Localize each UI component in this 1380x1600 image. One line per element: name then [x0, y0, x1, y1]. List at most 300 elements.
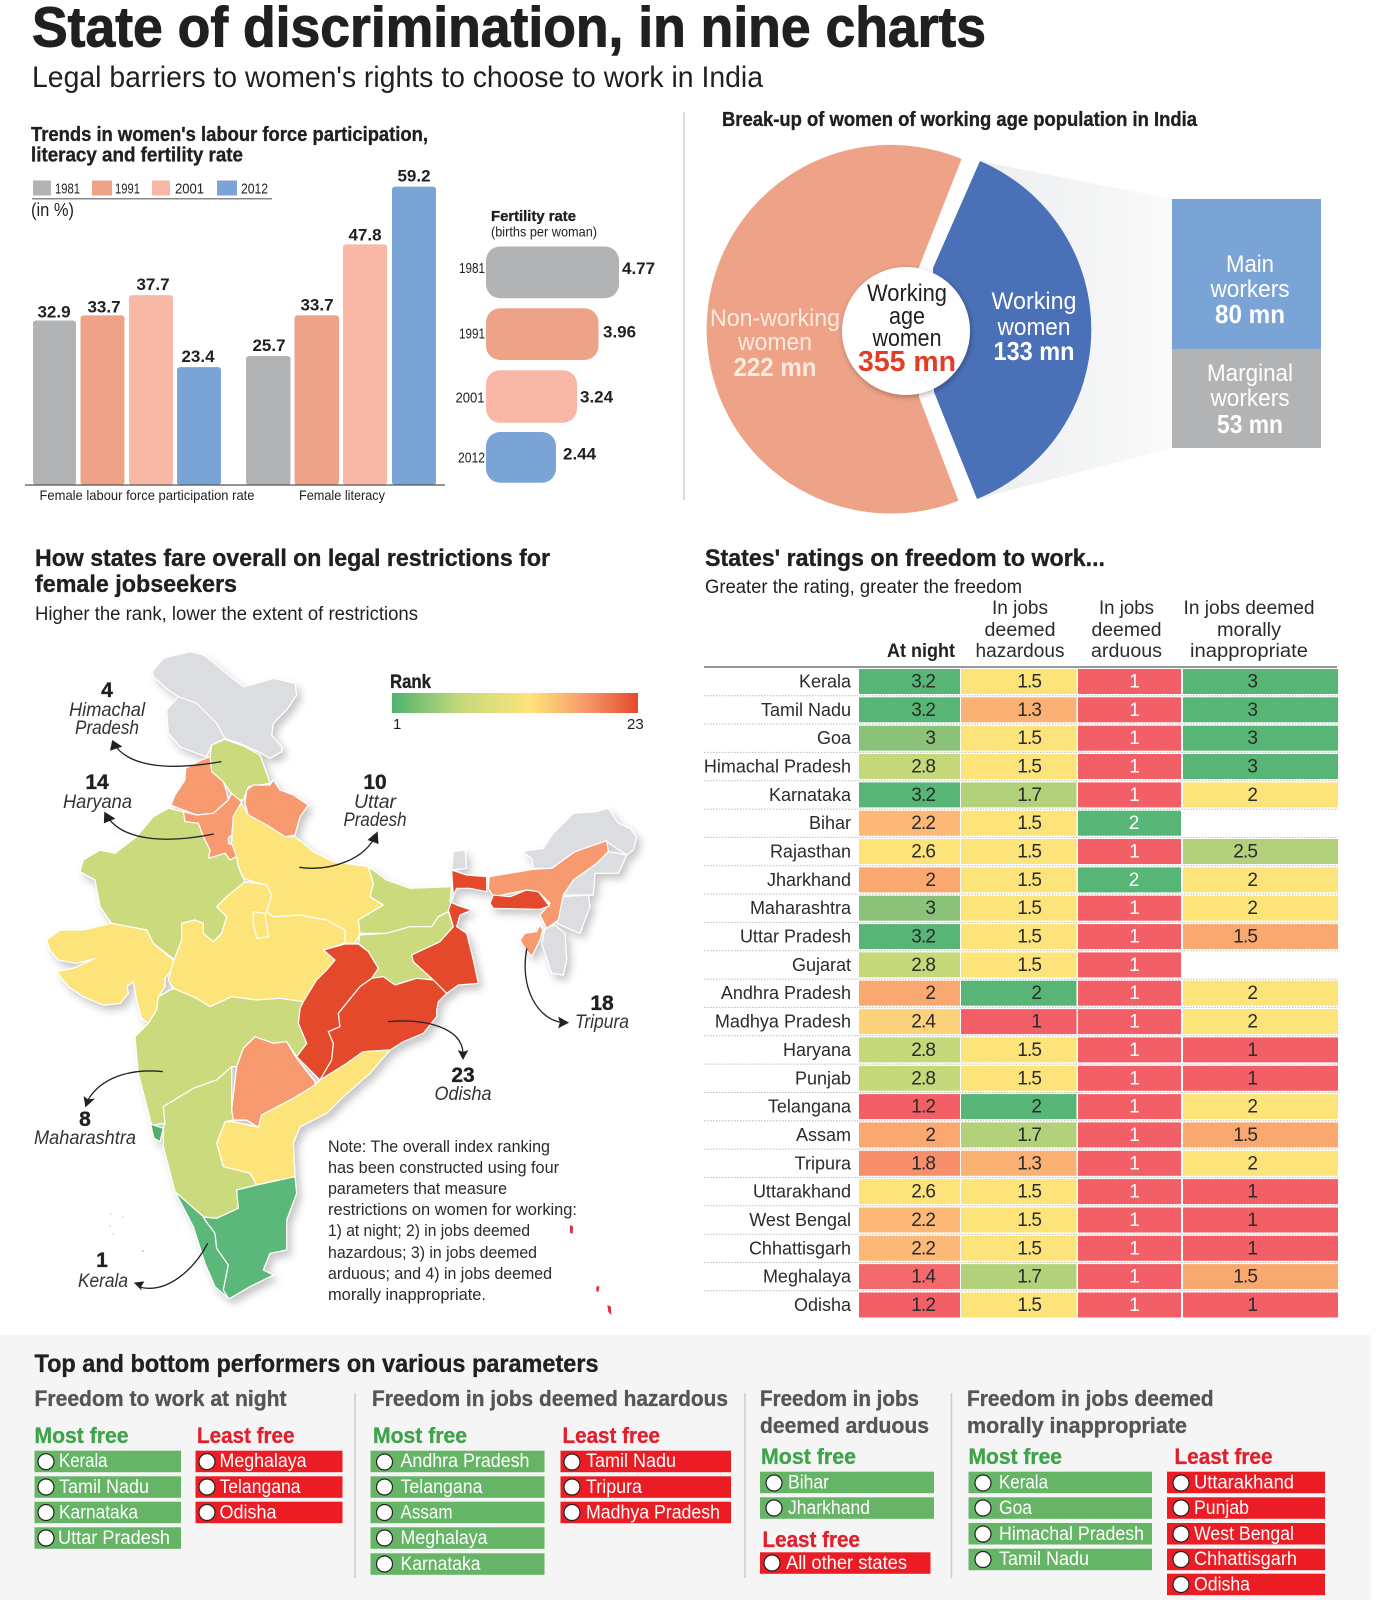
- row: Punjab: [704, 1066, 1338, 1092]
- row: Himachal Pradesh: 2.8: [911, 756, 935, 778]
- row: Karnataka: Karnataka: [769, 785, 852, 805]
- label: working women: [992, 288, 1076, 366]
- callout: Uttar Pradesh rank 10: Uttar: [354, 792, 397, 813]
- row: Jharkhand: Jharkhand: [767, 870, 851, 890]
- row: Assam: [704, 1122, 1338, 1149]
- row: Jharkhand: 2: [1247, 870, 1257, 891]
- centre circle: working age women: women: [872, 325, 942, 352]
- legend: rank scale: Rank: [390, 672, 431, 693]
- Bundelkhand lobe: [253, 912, 268, 938]
- list: hazardous most free: Meghalaya: [400, 1528, 488, 1549]
- bar chart: fertility rate: 1981: [459, 260, 485, 277]
- heading: performers: Top and bottom performers on various parameters: [34, 1350, 598, 1378]
- row: Gujarat: Gujarat: [792, 955, 851, 975]
- arrow: Maharashtra: [84, 1071, 163, 1107]
- row: Kerala: Kerala: [799, 672, 852, 692]
- row: Goa: 3: [1247, 728, 1257, 749]
- column headers: morally: [1217, 620, 1282, 641]
- arrow: Odisha: [388, 1021, 468, 1060]
- row: Andhra Pradesh: 2: [1247, 983, 1257, 1004]
- row: Kerala: [704, 669, 1338, 696]
- row: Rajasthan: 1.5: [1017, 842, 1041, 862]
- group: freedom in jobs deemed arduous: [760, 1386, 934, 1574]
- list: morally inappropriate most free: [968, 1444, 1152, 1570]
- Odisha: [320, 977, 447, 1080]
- callout: Tripura rank 18: [575, 992, 629, 1033]
- list: night most free: Karnataka: [59, 1502, 138, 1524]
- row: Andhra Pradesh: [704, 981, 1338, 1007]
- row: Himachal Pradesh: Himachal Pradesh: [704, 756, 851, 776]
- row: Himachal Pradesh: 1: [1129, 756, 1140, 778]
- list: arduous least free: [760, 1527, 930, 1574]
- list: hazardous most free: Most free: [373, 1423, 467, 1448]
- row: Punjab: 1.5: [1017, 1068, 1041, 1089]
- list: night most free: Tamil Nadu: [59, 1477, 149, 1498]
- map of India: [47, 652, 637, 1315]
- heading: ratings: States' ratings on freedom to work...: [705, 545, 1105, 572]
- bar chart: labour force participation: [33, 275, 221, 485]
- note: index methodology: Note: The overall index ranking: [328, 1137, 550, 1156]
- list: morally inappropriate most free: Goa: [999, 1498, 1032, 1519]
- callout: Kerala rank 1: Kerala: [78, 1271, 128, 1292]
- legend: years: 2001: [175, 181, 204, 198]
- row: Uttar Pradesh: [704, 924, 1338, 951]
- heading: fertility rate: (births per woman): [491, 223, 597, 239]
- list: arduous least free: All other states: [786, 1553, 907, 1574]
- row: Telangana: [704, 1094, 1338, 1121]
- heading: arduous: [760, 1386, 929, 1438]
- row: Gujarat: 1.5: [1017, 955, 1041, 976]
- centre circle: working age women: age: [889, 303, 925, 330]
- row: Uttar Pradesh: 1: [1129, 927, 1140, 948]
- bar chart: fertility rate: [456, 246, 655, 483]
- row: Kerala: 3.2: [911, 672, 935, 692]
- callout: Odisha rank 23: 23: [451, 1064, 475, 1087]
- row: Chhattisgarh: 2.2: [911, 1238, 935, 1259]
- callout: Odisha rank 23: [434, 1064, 492, 1105]
- islands: Lakshadweep: [109, 1213, 144, 1252]
- row: Gujarat: 2.8: [911, 955, 935, 976]
- row: Meghalaya: 1: [1129, 1267, 1140, 1288]
- row: West Bengal: [704, 1208, 1338, 1234]
- subheading: map: Higher the rank, lower the extent of restrictions: [35, 604, 418, 625]
- note: index methodology: arduous; and 4) in jobs deemed: [328, 1264, 552, 1283]
- row: Andhra Pradesh: 2: [1031, 983, 1041, 1004]
- list: hazardous most free: Karnataka: [400, 1554, 481, 1575]
- callout: Uttar Pradesh rank 10: [344, 771, 406, 831]
- list: morally inappropriate least free: Least free: [1174, 1444, 1272, 1469]
- note: index methodology: morally inappropriate.: [328, 1285, 486, 1304]
- arrows and islands: [84, 740, 611, 1315]
- Chhattisgarh: [297, 944, 378, 1080]
- heading: morally inappropriate: [967, 1386, 1214, 1438]
- row: Uttar Pradesh: 1.5: [1233, 927, 1257, 948]
- row: Madhya Pradesh: [704, 1009, 1338, 1036]
- callout: Haryana rank 14: [63, 771, 132, 813]
- row: Rajasthan: 2.5: [1233, 842, 1257, 862]
- label: working women: Working: [992, 288, 1076, 315]
- label: working women: 133 mn: [994, 336, 1074, 366]
- row: Kerala: 1: [1129, 672, 1140, 692]
- row: Odisha: 1.5: [1017, 1295, 1041, 1316]
- axis label: labour force: Female labour force participation rate: [40, 487, 255, 503]
- row: Punjab: 2.8: [911, 1068, 935, 1089]
- bar chart: labour force participation: 33.7: [87, 297, 121, 316]
- legend: years: 1991: [115, 181, 140, 198]
- row: Karnataka: 2: [1247, 785, 1257, 806]
- row: Tripura: 1.8: [911, 1153, 935, 1174]
- list: night least free: Telangana: [220, 1477, 301, 1498]
- panel: state rank map: [34, 545, 644, 1315]
- row: Uttar Pradesh: 3.2: [911, 927, 935, 948]
- note: index methodology: restrictions on women for working:: [328, 1200, 577, 1219]
- row: Telangana: Telangana: [768, 1097, 852, 1117]
- list: night least free: [196, 1423, 342, 1524]
- row: Punjab: 1: [1129, 1068, 1140, 1089]
- Haryana: [183, 793, 242, 860]
- row: Odisha: 1: [1129, 1295, 1140, 1316]
- Jharkhand: [358, 912, 453, 985]
- column headers: deemed: [984, 620, 1056, 641]
- heading: night: Freedom to work at night: [34, 1386, 287, 1411]
- pie slice: non-working women: [707, 145, 962, 514]
- column headers: [887, 598, 1314, 662]
- Bihar: [358, 867, 452, 933]
- list: night most free: Kerala: [59, 1451, 108, 1472]
- row: Telangana: 1: [1129, 1097, 1140, 1118]
- row: Maharashtra: 1: [1129, 898, 1140, 919]
- bar chart: female literacy: 59.2: [397, 166, 431, 186]
- Tripura: [520, 925, 543, 957]
- callout: Maharashtra rank 8: Maharashtra: [34, 1128, 136, 1149]
- row: Meghalaya: 1.4: [911, 1267, 936, 1288]
- row: Odisha: 1: [1247, 1295, 1257, 1316]
- Rajasthan: [80, 808, 245, 960]
- row: Tamil Nadu: 1: [1129, 700, 1140, 721]
- row: Andhra Pradesh: Andhra Pradesh: [721, 983, 851, 1003]
- box: main workers: workers: [1210, 276, 1290, 303]
- Karnataka: [163, 1067, 257, 1218]
- row: Himachal Pradesh: [704, 754, 1338, 781]
- row: Goa: 1.5: [1017, 728, 1041, 749]
- row: Telangana: 1.2: [911, 1097, 935, 1118]
- row: Maharashtra: Maharashtra: [750, 898, 852, 918]
- note: index methodology: [328, 1137, 577, 1304]
- row: Andhra Pradesh: 1: [1129, 983, 1140, 1004]
- row: Jharkhand: [704, 867, 1338, 894]
- row: Bihar: 2: [1129, 813, 1139, 834]
- row: Madhya Pradesh: 1: [1031, 1012, 1041, 1033]
- row: Madhya Pradesh: 2.4: [911, 1012, 936, 1033]
- row: Uttarakhand: [704, 1179, 1338, 1206]
- Manipur: [557, 895, 590, 933]
- row: Tripura: 1: [1129, 1153, 1140, 1174]
- row: Karnataka: 1: [1129, 785, 1140, 806]
- subheading: ratings: Greater the rating, greater the freedom: [705, 577, 1022, 598]
- row: Gujarat: [704, 952, 1338, 979]
- row: Meghalaya: 1.7: [1017, 1267, 1041, 1288]
- list: hazardous least free: Least free: [562, 1423, 660, 1448]
- row: Uttarakhand: 1: [1129, 1182, 1140, 1203]
- list: arduous most free: Jharkhand: [788, 1498, 870, 1519]
- column headers: deemed: [1092, 620, 1162, 641]
- heading: break-up: Break-up of women of working age population in India: [722, 109, 1198, 131]
- bar chart: fertility rate: 2001: [456, 390, 484, 407]
- column headers: hazardous: [976, 641, 1064, 662]
- list: arduous least free: Least free: [762, 1527, 860, 1552]
- arrow: Uttar Pradesh: [299, 831, 379, 868]
- heading: trends: Trends in women's labour force participation,: [31, 124, 428, 146]
- list: hazardous least free: Tripura: [586, 1477, 642, 1498]
- callout: Maharashtra rank 8: 8: [79, 1108, 91, 1131]
- legend: rank scale: 23: [627, 716, 644, 733]
- row: Madhya Pradesh: Madhya Pradesh: [715, 1012, 851, 1032]
- heading: trends: literacy and fertility rate: [31, 144, 243, 166]
- callout: Odisha rank 23: Odisha: [434, 1084, 492, 1105]
- list: morally inappropriate least free: West Bengal: [1194, 1524, 1294, 1545]
- row: Jharkhand: 1.5: [1017, 870, 1041, 891]
- bar chart: female literacy: 33.7: [300, 295, 334, 314]
- row: Assam: 1.7: [1017, 1125, 1041, 1146]
- row: Punjab: 1: [1247, 1068, 1257, 1089]
- row: West Bengal: 1: [1247, 1210, 1257, 1231]
- row: West Bengal: 2.2: [911, 1210, 935, 1231]
- row: Maharashtra: [704, 896, 1338, 922]
- bar chart: female literacy: 47.8: [348, 225, 382, 244]
- callout: Uttar Pradesh rank 10: Pradesh: [344, 810, 406, 831]
- row: Rajasthan: 2.6: [911, 842, 935, 862]
- list: hazardous least free: [560, 1423, 731, 1524]
- row: West Bengal: 1.5: [1017, 1210, 1041, 1231]
- callout: Tripura rank 18: 18: [590, 992, 614, 1015]
- note: index methodology: 1) at night; 2) in jobs deemed: [328, 1221, 530, 1240]
- column headers: inappropriate: [1190, 641, 1308, 662]
- heading: morally inappropriate: morally inappropriate: [967, 1413, 1187, 1438]
- heading: hazardous: Freedom in jobs deemed hazardous: [372, 1386, 728, 1411]
- group: freedom in jobs deemed hazardous: [370, 1386, 731, 1575]
- group: freedom in jobs deemed morally inappropriate: [967, 1386, 1325, 1596]
- callout: Maharashtra rank 8: [34, 1108, 136, 1149]
- list: morally inappropriate least free: Uttarakhand: [1194, 1472, 1294, 1494]
- Mizoram: [542, 925, 567, 975]
- bar chart: female literacy: 25.7: [252, 336, 286, 355]
- list: night most free: Most free: [34, 1423, 128, 1448]
- list: morally inappropriate least free: Punjab: [1194, 1498, 1249, 1519]
- box: marginal workers: workers: [1210, 385, 1290, 412]
- bar chart: labour force participation: 23.4: [181, 347, 215, 366]
- list: hazardous most free: [370, 1423, 544, 1575]
- Andhra Pradesh: [217, 1050, 390, 1185]
- list: arduous most free: Most free: [761, 1444, 856, 1469]
- Assam: [488, 841, 608, 928]
- row: Tripura: [704, 1151, 1338, 1178]
- box: marginal workers: 53 mn: [1217, 409, 1283, 439]
- row: Madhya Pradesh: 2: [1247, 1012, 1257, 1033]
- row: Rajasthan: 1: [1129, 842, 1140, 862]
- callout: Haryana rank 14: Haryana: [63, 792, 132, 813]
- Goa: [151, 1124, 163, 1142]
- legend: years: 1981: [55, 181, 80, 198]
- West Bengal: [412, 870, 487, 993]
- list: morally inappropriate least free: Odisha: [1194, 1574, 1250, 1596]
- bar chart: labour force participation: 32.9: [37, 302, 71, 321]
- row: Bihar: 1.5: [1017, 813, 1041, 834]
- row: Maharashtra: 2: [1247, 898, 1257, 919]
- row: Tripura: Tripura: [795, 1153, 852, 1173]
- row: Telangana: 2: [1247, 1097, 1257, 1118]
- row: Tamil Nadu: 3: [1247, 700, 1257, 721]
- bar chart: fertility rate: 1991: [459, 326, 485, 343]
- list: morally inappropriate most free: Kerala: [999, 1472, 1048, 1494]
- list: arduous most free: [760, 1444, 934, 1519]
- heading: fertility rate: Fertility rate: [491, 208, 576, 225]
- list: morally inappropriate most free: Most free: [968, 1444, 1062, 1469]
- row: Kerala: 3: [1247, 672, 1257, 692]
- Tamil Nadu: [203, 1177, 297, 1298]
- arrow: Haryana: [104, 812, 214, 839]
- Punjab: [171, 757, 228, 815]
- Arunachal Pradesh: [522, 808, 637, 868]
- list: hazardous most free: Telangana: [400, 1477, 483, 1498]
- panel: state ratings table: [704, 545, 1338, 1318]
- bar chart: fertility rate: 3.24: [580, 388, 614, 407]
- row: Goa: [704, 726, 1338, 752]
- list: night least free: Meghalaya: [220, 1451, 307, 1472]
- label: working women: women: [997, 314, 1070, 341]
- Nagaland: [563, 852, 627, 895]
- row: Bihar: 2.2: [911, 813, 935, 834]
- state shapes: [47, 652, 637, 1298]
- Gujarat: [47, 923, 175, 1023]
- row: Tripura: 2: [1247, 1153, 1257, 1174]
- list: night most free: Uttar Pradesh: [58, 1528, 170, 1549]
- label: non-working women: women: [737, 329, 812, 356]
- row: Haryana: [704, 1037, 1338, 1064]
- callout: Himachal Pradesh rank 4: Pradesh: [75, 718, 139, 739]
- centre circle: working age women: [842, 267, 970, 395]
- note: index methodology: parameters that measure: [328, 1179, 507, 1198]
- row: Assam: 1: [1129, 1125, 1140, 1146]
- unit note: (in %): [31, 200, 74, 220]
- callout: Haryana rank 14: 14: [85, 771, 109, 794]
- row: Bihar: [704, 811, 1338, 837]
- legend: years: 2012: [241, 181, 268, 198]
- bar chart: fertility rate: 2.44: [563, 444, 597, 463]
- callout: Kerala rank 1: [78, 1249, 128, 1292]
- Meghalaya: [490, 890, 549, 909]
- row: Tripura: 1.3: [1017, 1153, 1041, 1174]
- heading: arduous: Freedom in jobs: [760, 1386, 919, 1411]
- row: Assam: 2: [925, 1125, 935, 1146]
- row: Assam: Assam: [796, 1125, 851, 1145]
- bar chart: labour force participation: 37.7: [136, 275, 170, 294]
- row: Jharkhand: 2: [1129, 870, 1139, 891]
- centre circle: working age women: Working: [867, 280, 947, 307]
- heading: map: female jobseekers: [35, 571, 237, 598]
- label: non-working women: [710, 305, 840, 382]
- callout: Himachal Pradesh rank 4: 4: [101, 679, 113, 702]
- row: Rajasthan: Rajasthan: [770, 842, 851, 862]
- row: Uttarakhand: 2.6: [911, 1182, 935, 1203]
- heading: morally inappropriate: Freedom in jobs deemed: [967, 1386, 1214, 1411]
- row: Madhya Pradesh: 1: [1129, 1012, 1140, 1033]
- panel: break-up of working age women: [707, 109, 1321, 514]
- Andaman islands: [570, 1225, 611, 1315]
- bar chart: fertility rate: 3.96: [603, 323, 636, 342]
- row: Chhattisgarh: [704, 1236, 1338, 1262]
- row: Karnataka: 1.7: [1017, 785, 1041, 806]
- row: Rajasthan: [704, 839, 1338, 866]
- row: Uttarakhand: Uttarakhand: [753, 1182, 851, 1202]
- list: morally inappropriate most free: Himachal Pradesh: [999, 1524, 1144, 1545]
- row: Karnataka: [704, 782, 1338, 809]
- callout: Uttar Pradesh rank 10: 10: [363, 771, 387, 794]
- row: Karnataka: 3.2: [911, 785, 935, 806]
- Madhya Pradesh: [168, 882, 345, 1007]
- row: Tamil Nadu: [704, 697, 1338, 724]
- row: Meghalaya: 1.5: [1233, 1267, 1257, 1288]
- note: index methodology: has been constructed using four: [328, 1158, 559, 1177]
- row: Uttar Pradesh: 1.5: [1017, 927, 1041, 948]
- list: arduous most free: Bihar: [788, 1472, 830, 1494]
- list: night most free: [34, 1423, 181, 1549]
- row: Chhattisgarh: Chhattisgarh: [749, 1238, 851, 1258]
- list: night least free: Odisha: [220, 1502, 277, 1524]
- row: West Bengal: 1: [1129, 1210, 1140, 1231]
- list: night least free: Least free: [197, 1423, 294, 1448]
- row: Chhattisgarh: 1.5: [1017, 1238, 1041, 1259]
- column headers: arduous: [1091, 641, 1162, 662]
- heading: map: [35, 545, 550, 598]
- panel: top and bottom performers: [0, 1335, 1371, 1600]
- Delhi: [228, 836, 235, 844]
- list: morally inappropriate most free: Tamil Nadu: [999, 1549, 1089, 1570]
- row: Tamil Nadu: Tamil Nadu: [761, 700, 851, 720]
- row: Punjab: Punjab: [795, 1068, 851, 1088]
- column headers: In jobs: [1099, 598, 1154, 619]
- note: index methodology: hazardous; 3) in jobs deemed: [328, 1243, 537, 1262]
- row: Chhattisgarh: 1: [1129, 1238, 1140, 1259]
- box: marginal workers: [1172, 349, 1321, 448]
- row: Himachal Pradesh: 3: [1247, 756, 1257, 778]
- column headers: In jobs deemed: [1184, 598, 1314, 619]
- row: Haryana: 2.8: [911, 1040, 935, 1061]
- bar chart: fertility rate: 2012: [458, 450, 485, 466]
- bar chart: fertility rate: 4.77: [622, 259, 655, 278]
- row: Kerala: 1.5: [1017, 672, 1041, 692]
- row: Goa: Goa: [817, 728, 852, 748]
- row: Gujarat: 1: [1129, 955, 1140, 976]
- arrow: Tripura: [525, 948, 569, 1028]
- column headers: At night: [887, 641, 956, 662]
- row: Haryana: 1: [1247, 1040, 1257, 1061]
- heading: trends: [31, 124, 428, 166]
- legend: years: [32, 180, 272, 199]
- row: Odisha: [794, 1292, 1338, 1318]
- group: freedom to work at night: [34, 1386, 342, 1549]
- row: Odisha: 1.2: [911, 1295, 935, 1316]
- arrow: Kerala: [134, 1243, 208, 1291]
- row: Goa: 1: [1129, 728, 1140, 749]
- list: hazardous most free: Andhra Pradesh: [400, 1451, 530, 1472]
- Sikkim: [452, 850, 467, 870]
- row: Tamil Nadu: 3.2: [911, 700, 935, 721]
- row: Maharashtra: 1.5: [1017, 898, 1041, 919]
- row: Meghalaya: [704, 1264, 1338, 1291]
- Uttarakhand: [245, 780, 308, 837]
- callout: Himachal Pradesh rank 4: [69, 679, 146, 739]
- box: main workers: Main: [1226, 251, 1274, 278]
